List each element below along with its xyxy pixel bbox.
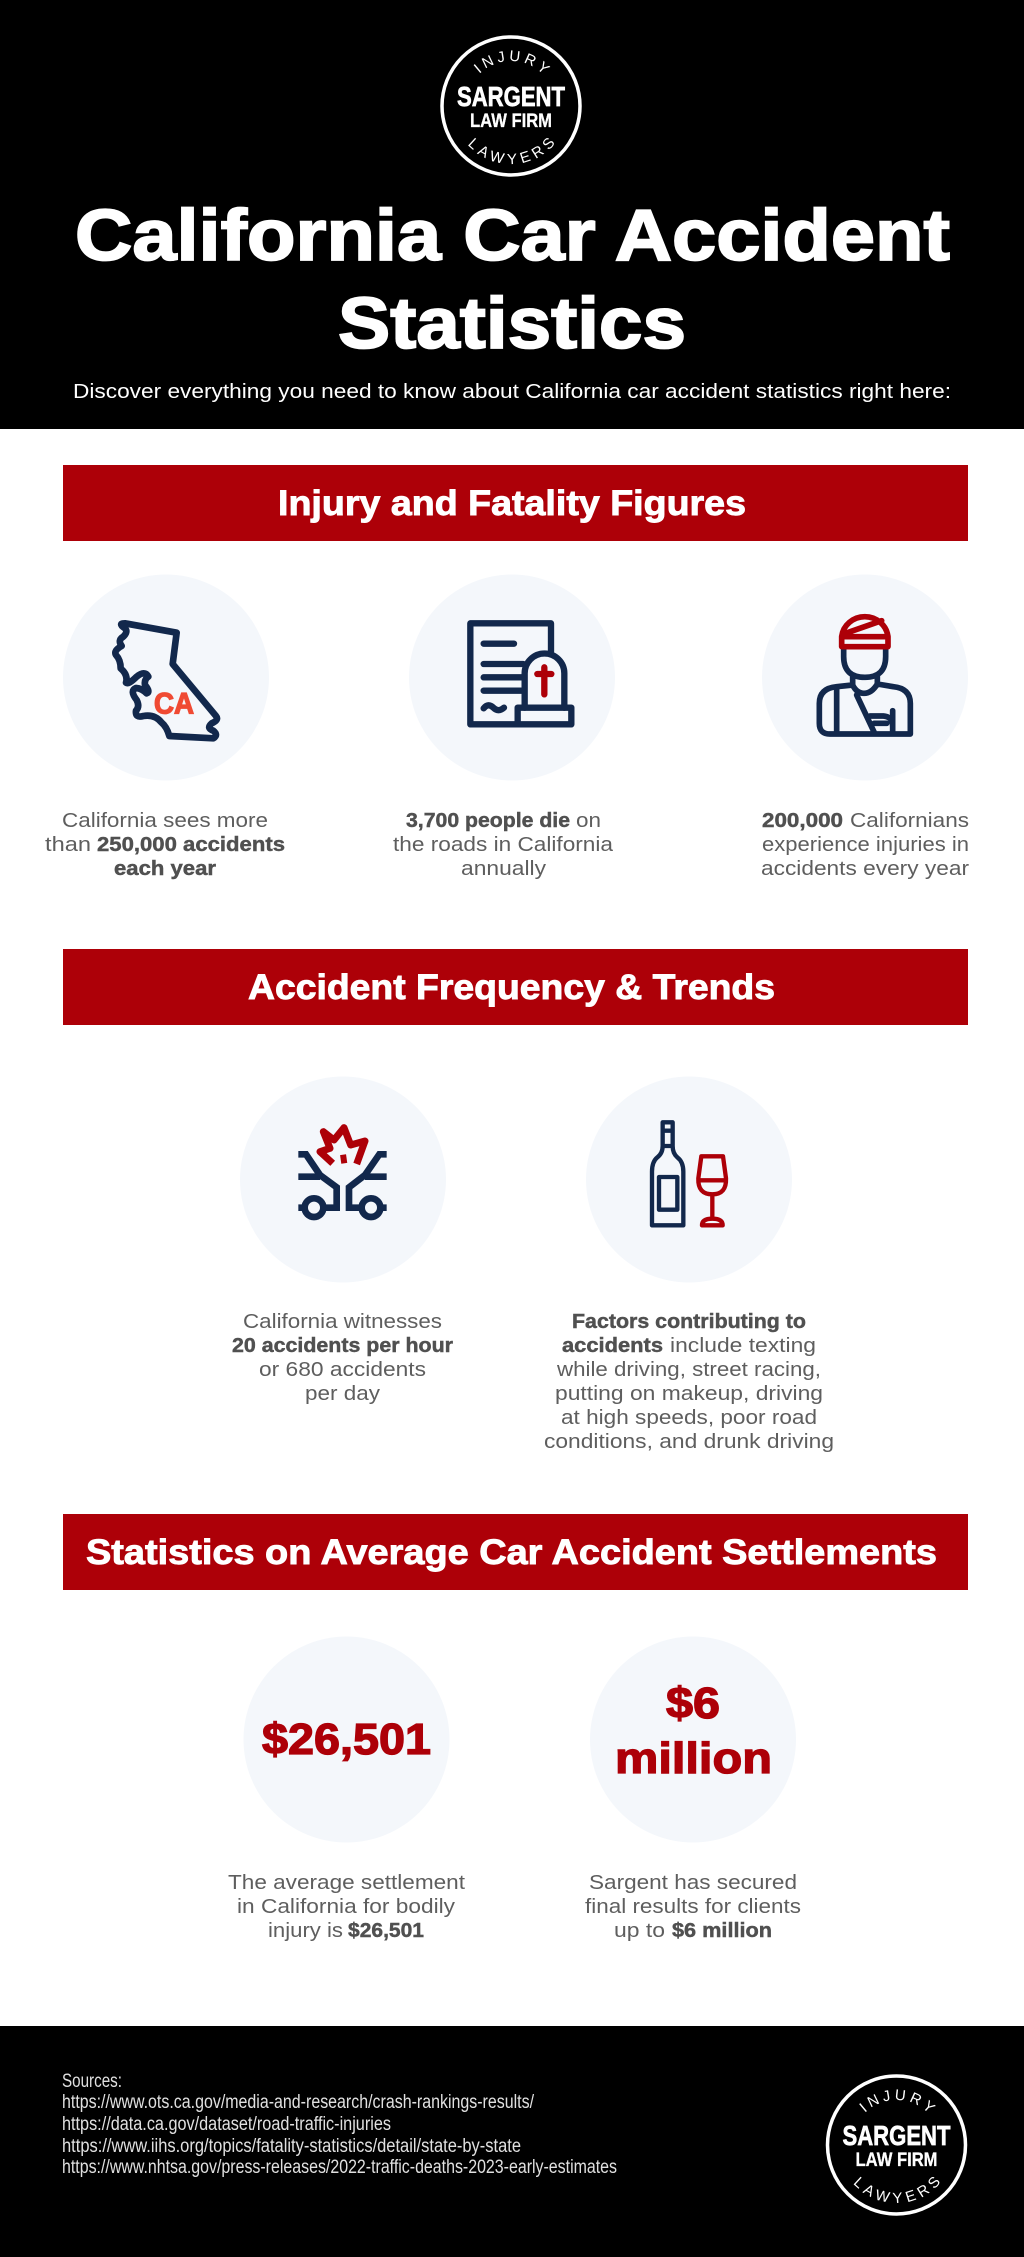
text: 20 accidents per hour: 20 accidents per hour xyxy=(232,1335,453,1357)
section heading: Injury and Fatality Figures xyxy=(63,465,968,541)
section: injury and fatality figures xyxy=(45,465,969,880)
section: average settlements xyxy=(63,1514,968,1942)
section: accident frequency and trends xyxy=(63,949,968,1453)
text: 200,000 Californians: 200,000 xyxy=(762,810,843,832)
sources list: https://www.nhtsa.gov/press-releases/2022-traffic-deaths-2023-early-estimates xyxy=(62,2157,617,2178)
text: final results description: up to xyxy=(614,1920,665,1942)
icon: injured person xyxy=(819,617,910,734)
logo: Sargent Law Firm: LAW FIRM xyxy=(470,111,552,132)
section heading: Accident Frequency & Trends: Accident Frequency & Trends xyxy=(248,968,775,1007)
text: average settlement description: in California for bodily xyxy=(237,1896,455,1918)
text: 250,000 accidents each year: than xyxy=(45,834,91,856)
logo: Sargent Law Firm footer xyxy=(826,2074,968,2216)
card: accidents per hour xyxy=(232,1076,453,1405)
text: 3,700 people die xyxy=(393,810,614,880)
text: 250,000 accidents each year: each year xyxy=(114,858,216,880)
card: average settlement xyxy=(228,1636,465,1942)
text: factors contributing to accidents: accidents xyxy=(562,1335,663,1357)
text: 250,000 accidents each year xyxy=(45,810,285,880)
text: factors contributing to accidents: putting on makeup, driving xyxy=(555,1383,823,1405)
title: Statistics xyxy=(338,284,686,364)
stat: $26,501: $26,501 xyxy=(262,1715,431,1764)
text: factors contributing to accidents xyxy=(544,1311,834,1453)
stat: $6 million: million xyxy=(615,1734,772,1783)
card: $6 million result xyxy=(585,1636,801,1942)
logo: Sargent Law Firm xyxy=(440,35,582,177)
text: final results description: $6 million xyxy=(672,1920,772,1942)
text: factors contributing to accidents: at high speeds, poor road xyxy=(561,1407,817,1429)
title: California Car Accident xyxy=(75,196,950,276)
logo: Sargent Law Firm footer: LAWYERS xyxy=(854,2176,940,2203)
sources list xyxy=(62,2071,617,2178)
card: 3,700 deaths xyxy=(393,574,615,880)
text: final results description: final results for clients xyxy=(585,1896,801,1918)
sources list: https://data.ca.gov/dataset/road-traffic-injuries xyxy=(62,2114,391,2135)
subtitle: Discover everything you need to know about California car accident statistics right here: xyxy=(73,381,951,403)
section heading: Accident Frequency & Trends xyxy=(63,949,968,1025)
text: average settlement description: injury is xyxy=(268,1920,343,1942)
text: 3,700 people die: annually xyxy=(461,858,546,880)
text: 3,700 people die: on xyxy=(576,810,601,832)
text: average settlement description: $26,501 xyxy=(348,1920,424,1942)
text: average settlement description xyxy=(228,1872,465,1942)
section heading: Statistics on Average Car Accident Settlements xyxy=(63,1514,968,1590)
icon: car crash xyxy=(298,1128,387,1217)
stat: $6 million: $6 xyxy=(666,1679,720,1728)
card: 250,000 accidents xyxy=(45,574,285,880)
header panel xyxy=(0,0,1024,429)
card: 200,000 injuries xyxy=(761,574,969,880)
logo: Sargent Law Firm: SARGENT xyxy=(457,81,565,112)
text: 200,000 Californians xyxy=(761,810,969,880)
footer panel xyxy=(0,2026,1024,2257)
section heading: Statistics on Average Car Accident Settlements: Statistics on Average Car Accident Settlements xyxy=(86,1533,937,1572)
text: 20 accidents per hour: California witnesses xyxy=(243,1311,442,1333)
text: 200,000 Californians: Californians xyxy=(850,810,969,832)
icon: document and gravestone xyxy=(470,623,571,724)
text: factors contributing to accidents: Factors contributing to xyxy=(572,1311,806,1333)
text: average settlement description: The average settlement xyxy=(228,1872,465,1894)
icon: California map xyxy=(115,623,217,738)
text: factors contributing to accidents: include texting xyxy=(670,1335,816,1357)
card: contributing factors xyxy=(544,1076,834,1453)
logo: Sargent Law Firm footer: SARGENT xyxy=(842,2120,950,2151)
icon: wine bottle and glass xyxy=(652,1122,726,1225)
text: 3,700 people die: the roads in California xyxy=(393,834,614,856)
logo: Sargent Law Firm: INJURY xyxy=(474,50,550,73)
icon: California map: CA xyxy=(154,687,194,720)
logo: Sargent Law Firm: LAWYERS xyxy=(468,138,554,164)
text: 20 accidents per hour: per day xyxy=(305,1383,380,1405)
text: final results description xyxy=(585,1872,801,1942)
section heading: Injury and Fatality Figures: Injury and Fatality Figures xyxy=(278,484,746,523)
logo: Sargent Law Firm footer: LAW FIRM xyxy=(856,2150,938,2171)
text: final results description: Sargent has secured xyxy=(589,1872,797,1894)
text: 200,000 Californians: accidents every year xyxy=(761,858,969,880)
text: 250,000 accidents each year: California sees more xyxy=(62,810,268,832)
text: 20 accidents per hour xyxy=(232,1311,453,1405)
sources list: https://www.ots.ca.gov/media-and-research/crash-rankings-results/ xyxy=(62,2092,535,2113)
sources list: Sources: xyxy=(62,2071,122,2092)
stat: $6 million xyxy=(615,1679,772,1783)
title xyxy=(75,196,950,364)
text: 250,000 accidents each year: 250,000 accidents xyxy=(97,834,285,856)
text: 20 accidents per hour: or 680 accidents xyxy=(259,1359,426,1381)
sources list: https://www.iihs.org/topics/fatality-statistics/detail/state-by-state xyxy=(62,2136,521,2157)
text: factors contributing to accidents: while driving, street racing, xyxy=(556,1359,821,1381)
text: factors contributing to accidents: conditions, and drunk driving xyxy=(544,1431,834,1453)
logo: Sargent Law Firm footer: INJURY xyxy=(859,2089,936,2112)
text: 200,000 Californians: experience injuries in xyxy=(762,834,969,856)
text: 3,700 people die: 3,700 people die xyxy=(406,810,570,832)
